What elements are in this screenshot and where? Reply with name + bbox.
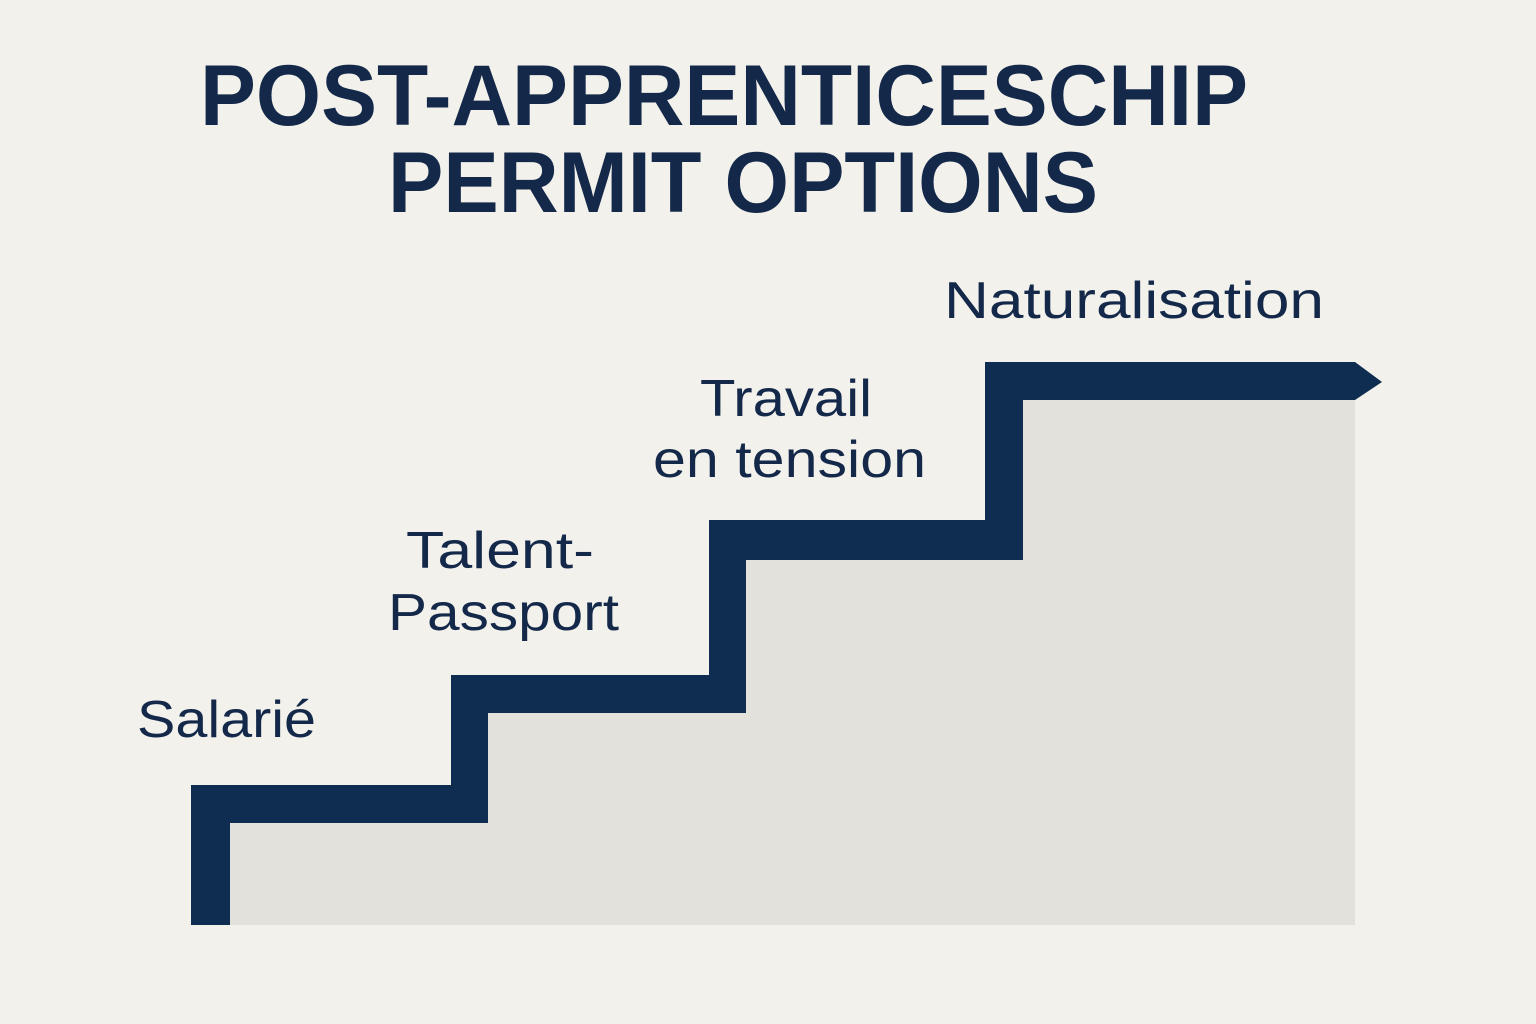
label: Naturalisation: Naturalisation: [944, 272, 1324, 330]
title: [200, 48, 1248, 231]
label: Talent-Passport: Talent-: [406, 522, 594, 580]
label: Talent-Passport: [388, 522, 620, 642]
title: PERMIT OPTIONS: [388, 135, 1098, 231]
label: Travail en tension: [653, 370, 926, 489]
staircase arrow: [191, 362, 1382, 925]
staircase fill area: [230, 400, 1355, 925]
label: Travail en tension: en tension: [653, 431, 926, 489]
label: Talent-Passport: Passport: [388, 584, 620, 642]
label: Travail en tension: Travail: [700, 370, 872, 428]
title: POST-APPRENTICESCHIP: [200, 48, 1248, 144]
label: Salarié: Salarié: [137, 691, 316, 749]
